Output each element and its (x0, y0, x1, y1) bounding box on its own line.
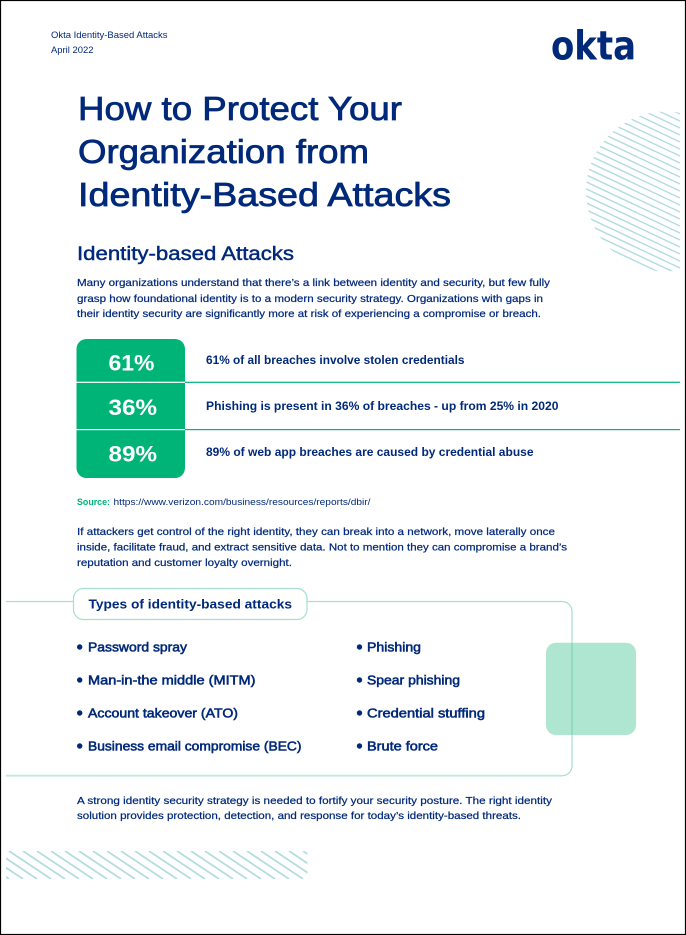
panel: types of identity-based attacks (6, 588, 572, 776)
green statistic block (76, 339, 185, 478)
closing paragraph: A strong identity security strategy is needed to fortify your security posture. The right identity (77, 795, 553, 807)
row divider 1 (76, 382, 680, 383)
panel outline (6, 602, 572, 776)
title: How to Protect Your (78, 90, 402, 127)
report header (51, 30, 168, 55)
closing paragraph: solution provides protection, detection, and response for today’s identity-based threats. (77, 810, 521, 822)
title (78, 90, 451, 213)
stat: 36%: 36% (108, 395, 157, 420)
bullet list: right column (357, 640, 485, 754)
report header: Okta Identity-Based Attacks (51, 30, 168, 40)
statistics panel (76, 339, 680, 478)
title: Identity-Based Attacks (78, 176, 451, 213)
section heading: Identity-based Attacks (77, 244, 294, 265)
bullet list: right column: Phishing (367, 640, 421, 655)
stat: 61%: 61% of all breaches involve stolen credentials (206, 355, 464, 367)
bullet list: left column: Business email compromise (BEC) (88, 739, 302, 754)
stat: 61%: 61% (108, 350, 154, 376)
panel heading pill: Types of identity-based attacks (88, 596, 292, 612)
stat: 36%: Phishing is present in 36% of breaches - up from 25% in 2020 (206, 401, 558, 413)
bullet list: left column: Password spray (88, 640, 188, 655)
intro paragraph: Many organizations understand that there’s a link between identity and security, but few fully (77, 277, 551, 289)
stat: 61% (108, 350, 464, 376)
stat: 89%: 89% (108, 442, 157, 466)
second paragraph (77, 526, 567, 569)
okta logo: okta (551, 24, 636, 70)
report header: April 2022 (51, 45, 94, 55)
title: Organization from (78, 133, 369, 170)
row divider 2 (76, 429, 680, 430)
closing paragraph (77, 795, 553, 822)
intro paragraph (77, 277, 551, 320)
bullet list: right column: Spear phishing (367, 673, 460, 688)
decorative striped band (6, 851, 308, 879)
bullet list: left column: Account takeover (ATO) (88, 706, 238, 721)
bullet list: left column: Man-in-the middle (MITM) (88, 673, 255, 688)
bullet list: right column: Brute force (367, 739, 438, 754)
stat: 89%: 89% of web app breaches are caused by credential abuse (206, 447, 534, 459)
bullet list: right column: Credential stuffing (367, 706, 485, 721)
stat: 36% (108, 395, 558, 420)
bullet list: left column (77, 640, 302, 754)
stat: 89% (108, 442, 534, 466)
source line: Source: (77, 497, 110, 507)
second paragraph: reputation and customer loyalty overnight. (77, 557, 292, 569)
second paragraph: If attackers get control of the right identity, they can break into a network, move laterally once (77, 526, 555, 538)
panel heading pill (74, 588, 307, 620)
second paragraph: inside, facilitate fraud, and extract sensitive data. Not to mention they can compromise a brand’s (77, 542, 567, 554)
decorative green square (546, 643, 636, 735)
intro paragraph: their identity security are significantly more at risk of experiencing a compromise or breach. (77, 308, 541, 320)
source line: https://www.verizon.com/business/resources/reports/dbir/ (114, 497, 371, 507)
decorative striped circle (586, 112, 680, 272)
intro paragraph: grasp how foundational identity is to a modern security strategy. Organizations with gaps in (77, 293, 543, 305)
